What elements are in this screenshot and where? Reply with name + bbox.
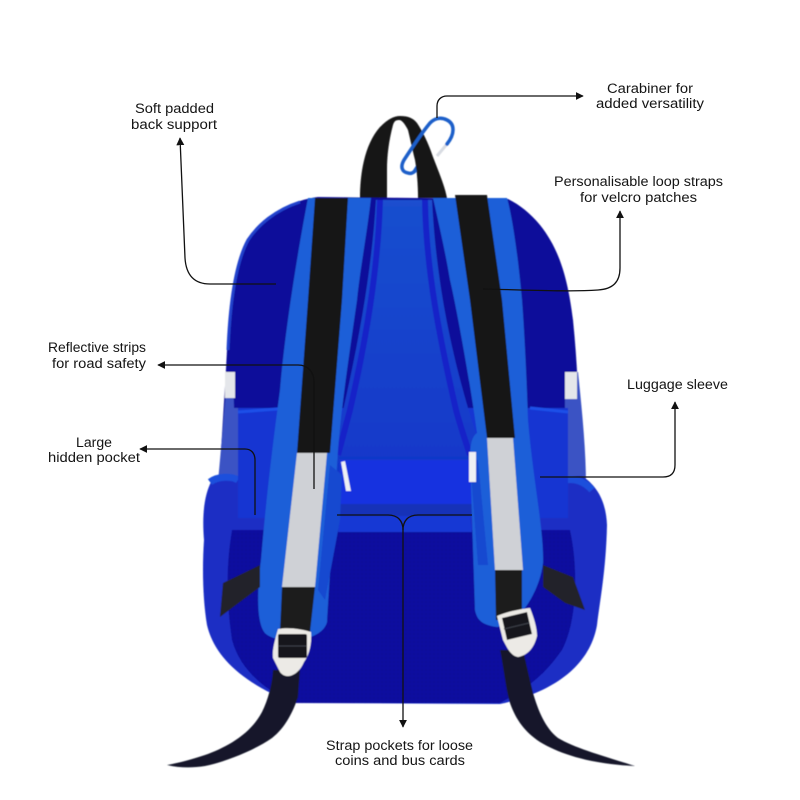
- right strap: [433, 198, 543, 627]
- label: luggage sleeve: Luggage sleeve: [627, 377, 728, 392]
- left strap webbing: [297, 198, 348, 453]
- reflective side strip right: [565, 372, 577, 399]
- callout: carabiner: [437, 81, 704, 118]
- arrow: hidden pocket: [140, 449, 255, 515]
- pocket piping right: [530, 408, 568, 412]
- callout: strap pockets: [326, 515, 473, 768]
- left buckle: [273, 628, 311, 676]
- zipper pull left: [341, 461, 351, 491]
- connector: strap pockets right branch: [403, 515, 472, 530]
- right strap webbing: [455, 195, 515, 438]
- rim of front shell: [228, 202, 300, 350]
- lower mesh back: [228, 530, 575, 703]
- quilted front shell left: [218, 372, 258, 482]
- label: back support: back support: [131, 117, 217, 132]
- arrow: carabiner: [437, 96, 583, 118]
- backpack illustration: [167, 116, 635, 767]
- right lower webbing: [495, 570, 522, 620]
- icon: top handle: [360, 116, 447, 200]
- callout: luggage sleeve: [540, 377, 728, 477]
- side pocket rim right: [566, 479, 592, 490]
- label: coins and bus cards: coins and bus cards: [335, 753, 465, 768]
- callout: reflective strips: [48, 340, 314, 489]
- right strap tail: [500, 650, 635, 766]
- left reflective strip: [282, 453, 327, 587]
- label: for road safety: for road safety: [52, 356, 146, 371]
- label: hidden pocket: hidden pocket: [48, 450, 140, 465]
- label: soft padded: Soft padded: [135, 101, 214, 116]
- side pocket rim left: [210, 477, 238, 482]
- quilted front shell right: [540, 372, 586, 485]
- label: personalisable: Personalisable loop straps: [554, 174, 723, 189]
- zipper pull right: [469, 452, 476, 482]
- callout: hidden pocket: [48, 435, 255, 515]
- carabiner far side: [414, 150, 428, 172]
- arrow: luggage sleeve: [540, 402, 675, 477]
- label: added versatility: added versatility: [596, 96, 704, 111]
- left strap tail: [167, 670, 300, 767]
- centre panel piping right: [425, 200, 470, 455]
- label: carabiner for: Carabiner for: [607, 81, 694, 96]
- lower pocket opening: [338, 504, 474, 516]
- lower bag body: [203, 476, 607, 704]
- right buckle: [497, 608, 537, 657]
- centre back panel: [336, 200, 478, 512]
- side compression strap right: [543, 565, 585, 610]
- arrow: loop straps: [483, 211, 620, 291]
- callout: loop straps: [483, 174, 723, 291]
- horizontal bright band: [340, 460, 475, 504]
- right reflective strip: [487, 438, 523, 570]
- carabiner gate: [437, 144, 447, 156]
- left lower webbing: [280, 587, 315, 632]
- side compression strap left: [220, 565, 260, 617]
- upper pockets band right: [460, 408, 568, 518]
- label: large: Large: [76, 435, 112, 450]
- label: for velcro patches: for velcro patches: [580, 190, 697, 205]
- left strap zipper pocket: [318, 465, 342, 600]
- label: reflective strips: Reflective strips: [48, 340, 146, 355]
- icon: carabiner: [402, 118, 453, 173]
- upper pockets band left: [238, 408, 350, 518]
- label: strap pockets: Strap pockets for loose: [326, 738, 473, 753]
- arrow: reflective strips: [158, 365, 314, 489]
- left strap: [258, 198, 371, 640]
- right strap zipper pocket: [470, 460, 488, 565]
- arrow: strap pockets: [337, 515, 403, 727]
- callout: soft padded back support: [131, 101, 276, 284]
- centre panel piping left: [338, 200, 380, 455]
- lower pocket band: [338, 516, 472, 532]
- reflective side strip left: [225, 372, 235, 398]
- back panel upper: [220, 197, 579, 470]
- pocket piping left: [238, 408, 290, 412]
- arrow: back support: [180, 138, 276, 284]
